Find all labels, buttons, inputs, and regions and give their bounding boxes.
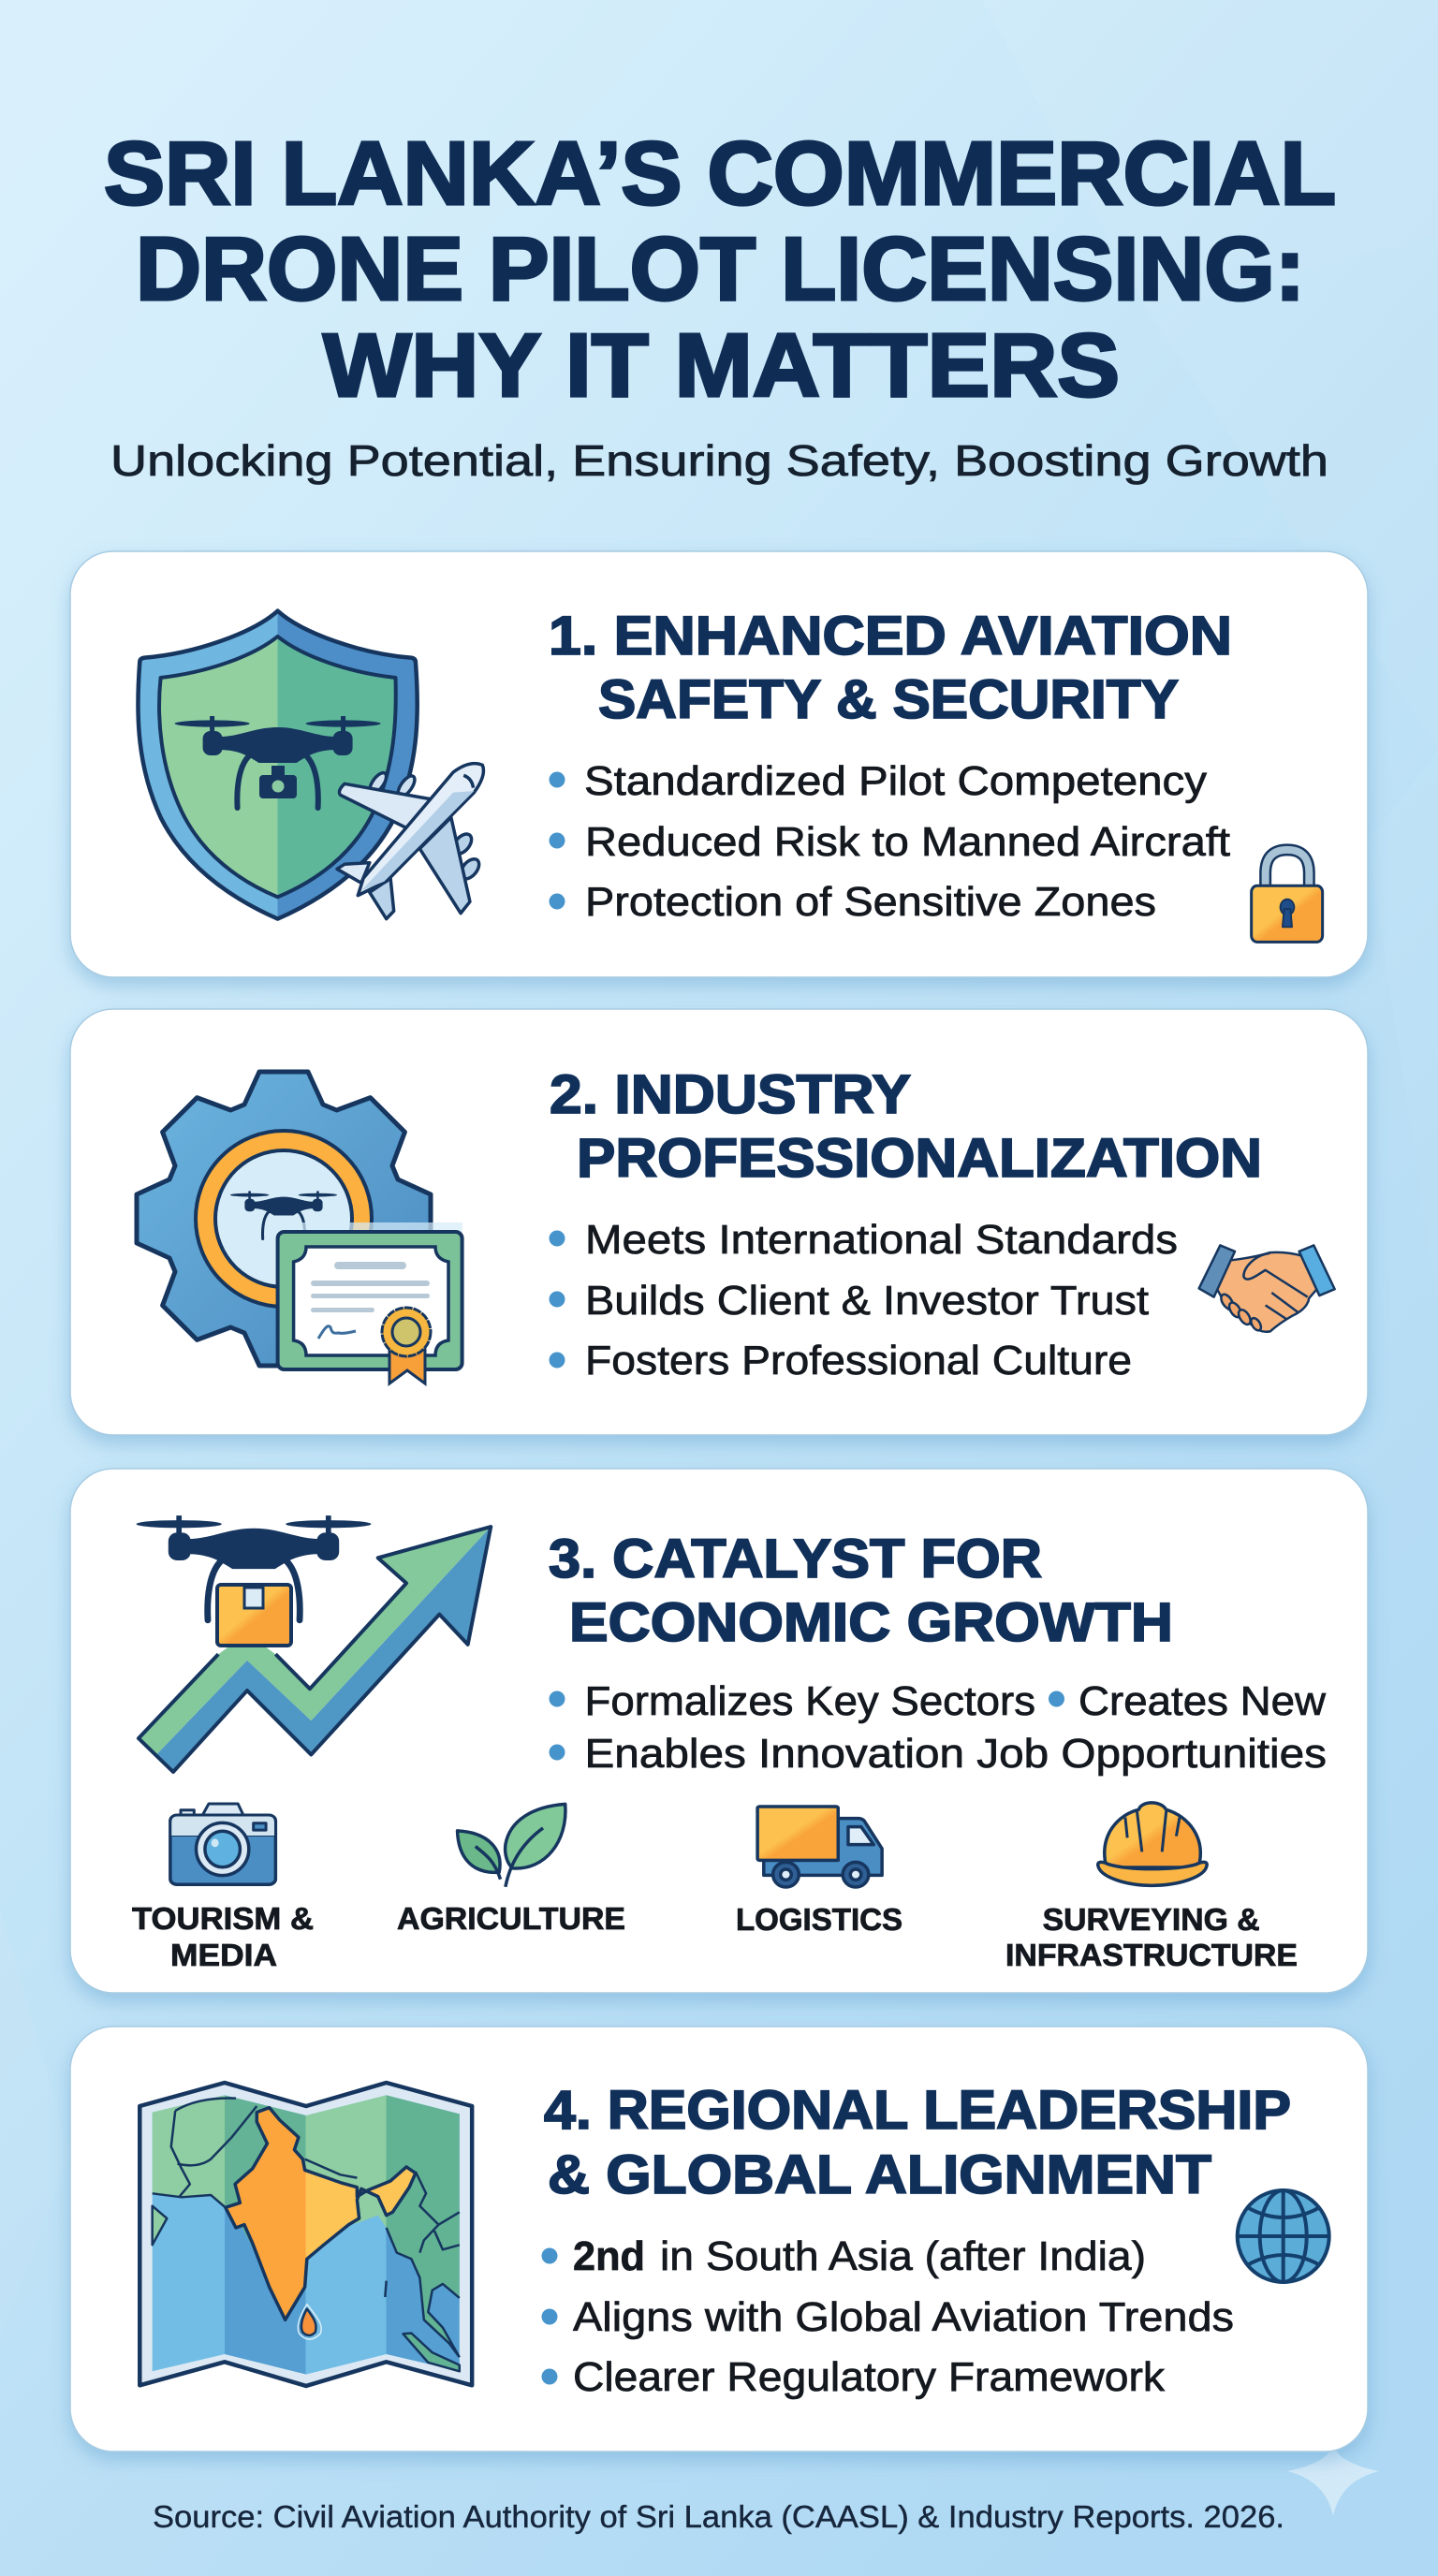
label: MEDIA: [170, 1938, 277, 1972]
sector: agriculture: [397, 1804, 625, 1936]
heading: 2. INDUSTRY: [550, 1064, 911, 1125]
title: WHY IT MATTERS: [323, 315, 1120, 416]
sector: tourism and media: [132, 1804, 314, 1972]
bullet list: Builds Client & Investor Trust: [585, 1278, 1149, 1324]
icon: gear with drone and certificate: [137, 1072, 462, 1383]
icon: folded map of South Asia: [139, 2083, 472, 2386]
bullet list: Standardized Pilot Competency: [584, 758, 1207, 804]
heading: 1. ENHANCED AVIATION: [549, 606, 1232, 666]
bullet list: Protection of Sensitive Zones: [585, 879, 1156, 925]
label: AGRICULTURE: [397, 1901, 625, 1936]
icon: truck: [757, 1807, 882, 1887]
bullet list: Formalizes Key Sectors: [584, 1678, 1035, 1724]
bullet list: Aligns with Global Aviation Trends: [573, 2294, 1234, 2340]
bullet list: [549, 1217, 1178, 1383]
source footer: Source: Civil Aviation Authority of Sri Lanka (CAASL) & Industry Reports. 2026.: [153, 2499, 1284, 2534]
icon: leaves: [458, 1804, 565, 1887]
icon: globe: [1238, 2190, 1329, 2282]
bullet list: Reduced Risk to Manned Aircraft: [585, 819, 1230, 865]
label: SURVEYING &: [1043, 1902, 1260, 1937]
icon: airplane: [337, 764, 483, 919]
subtitle: Unlocking Potential, Ensuring Safety, Boosting Growth: [110, 436, 1328, 485]
bullet list: Clearer Regulatory Framework: [573, 2354, 1166, 2400]
panel: aviation safety and security: [70, 551, 1368, 977]
panel: industry professionalization: [70, 1009, 1368, 1435]
heading: & GLOBAL ALIGNMENT: [548, 2144, 1211, 2205]
heading: [549, 1529, 1173, 1653]
icon: camera: [170, 1804, 275, 1884]
heading: [550, 1064, 1262, 1189]
label: INFRASTRUCTURE: [1005, 1938, 1298, 1972]
heading: [544, 2080, 1291, 2205]
bullet list: [549, 758, 1230, 925]
heading: PROFESSIONALIZATION: [577, 1128, 1262, 1189]
title: [104, 124, 1336, 416]
icon: hard hat: [1098, 1803, 1207, 1885]
label: TOURISM &: [132, 1901, 314, 1936]
bullet list: 2nd: [573, 2233, 645, 2279]
bullet list: [549, 1678, 1327, 1777]
heading: ECONOMIC GROWTH: [569, 1592, 1173, 1653]
icon: padlock: [1252, 850, 1323, 942]
decorative sparkle star: [1287, 2446, 1379, 2516]
heading: [549, 606, 1232, 730]
heading: 4. REGIONAL LEADERSHIP: [544, 2080, 1291, 2141]
bullet list: [541, 2233, 1234, 2400]
label: LOGISTICS: [736, 1902, 902, 1937]
icon: handshake: [1199, 1245, 1335, 1333]
title: DRONE PILOT LICENSING:: [136, 219, 1305, 319]
panel: economic growth: [70, 1469, 1368, 1993]
title: SRI LANKA’S COMMERCIAL: [104, 124, 1336, 224]
bullet list: in South Asia (after India): [660, 2233, 1146, 2279]
panel: regional leadership: [70, 2027, 1368, 2452]
bullet list: Creates New: [1078, 1678, 1326, 1724]
bullet list: Fosters Professional Culture: [585, 1338, 1132, 1383]
heading: SAFETY & SECURITY: [598, 669, 1179, 730]
label: [132, 1901, 314, 1972]
bullet list: Meets International Standards: [585, 1217, 1178, 1263]
icon: growth arrow with delivery drone: [137, 1515, 491, 1772]
icon: shield with drone: [138, 611, 418, 919]
heading: 3. CATALYST FOR: [549, 1529, 1042, 1589]
sector: surveying and infrastructure: [1005, 1803, 1298, 1972]
sector: logistics: [736, 1807, 902, 1937]
label: [1005, 1902, 1298, 1972]
bullet list: Enables Innovation Job Opportunities: [584, 1731, 1327, 1777]
